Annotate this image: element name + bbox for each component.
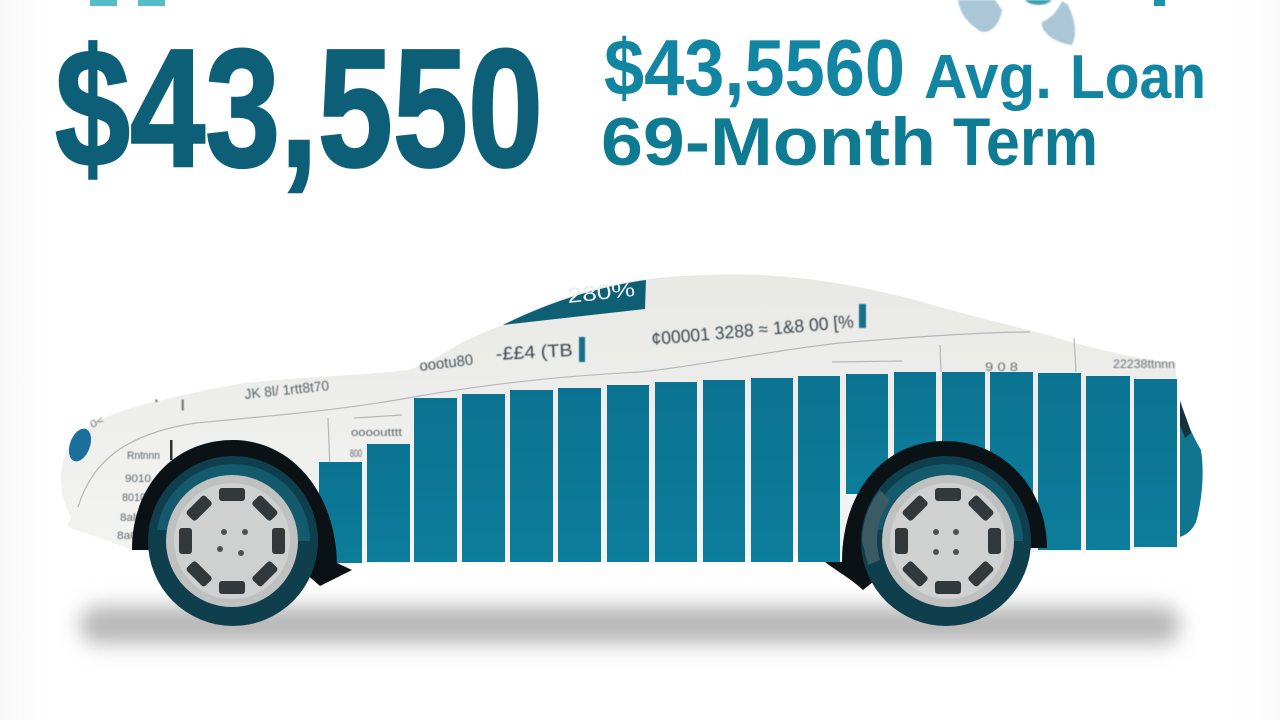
small text near short bars: 800	[350, 448, 362, 460]
top cropped decorative marks	[90, 0, 1165, 6]
ground shadow	[80, 606, 1180, 644]
label: Avg. Loan: Avg.	[924, 43, 1052, 112]
small text above rear bars	[985, 357, 1175, 374]
small text above rear bars: 9 0 8	[985, 360, 1018, 374]
small text on window: ¢00001 3288 ≈ 1&8 00 [%	[651, 311, 855, 349]
small text on fender: 8a0	[117, 530, 137, 542]
label: Avg. Loan	[924, 43, 1206, 112]
headlight	[65, 426, 95, 464]
small text on door: -££4 (TB	[495, 340, 573, 364]
small text on hood: ' |	[154, 397, 186, 411]
small text on fender	[117, 450, 160, 542]
arch	[132, 440, 352, 586]
small text on fender: 8010	[122, 492, 146, 504]
small text on fender: 8al0	[120, 512, 142, 524]
rim	[882, 475, 1014, 607]
small text on hood	[89, 377, 330, 431]
label: 69-Month Term: Term	[953, 104, 1098, 180]
small text on hood: 0<	[89, 415, 106, 431]
main figure: $43,550: $43,550	[55, 14, 543, 202]
small text near short bars	[350, 427, 402, 460]
bar chart forming the car side	[319, 372, 1177, 563]
small text on fender: Rntnnn	[127, 450, 160, 462]
small text on fender: 9010	[125, 473, 151, 485]
car illustration	[61, 275, 1203, 626]
front wheel	[132, 440, 352, 626]
label: 69-Month Term	[601, 104, 1098, 180]
percentage badge on roof: 280%	[566, 278, 636, 308]
tyre	[148, 456, 318, 626]
car body	[61, 275, 1178, 564]
secondary stat: $43,5560: $43,5560	[604, 23, 905, 112]
rim	[166, 475, 298, 607]
icon: pale blue blobs	[958, 0, 1075, 45]
small text on hood: JK 8l/ 1rtt8t70	[244, 377, 330, 402]
small text on door: oootu80	[418, 352, 474, 375]
small text on door	[418, 337, 585, 375]
tyre	[861, 456, 1031, 626]
rear bumper	[1180, 400, 1203, 537]
small text near short bars: ooooutttt	[351, 427, 402, 439]
rear wheel	[825, 441, 1047, 626]
label: 69-Month Term: 69-Month	[601, 104, 936, 180]
body crease lines	[78, 332, 1076, 507]
arch	[825, 441, 1047, 590]
fender tick	[170, 440, 172, 460]
small text above rear bars: 22238ttnnn	[1113, 357, 1175, 371]
label: Avg. Loan: Loan	[1070, 43, 1206, 112]
percentage badge on roof	[503, 278, 646, 325]
